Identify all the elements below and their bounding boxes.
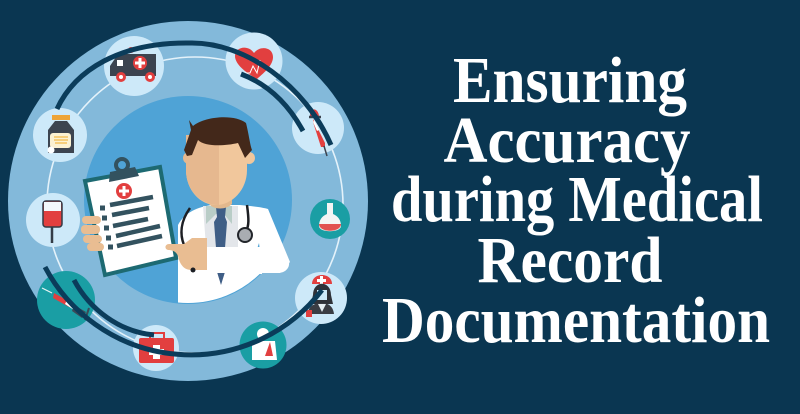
inner blue circle xyxy=(84,96,292,304)
face xyxy=(186,135,247,205)
neck xyxy=(209,192,232,208)
doctor figure xyxy=(81,117,290,303)
icon: heart xyxy=(226,32,282,90)
hand left xyxy=(81,216,104,251)
icon: syringe xyxy=(37,271,95,329)
icon: dropper xyxy=(292,102,344,156)
coat xyxy=(178,205,290,303)
thin white ring xyxy=(47,57,343,353)
pointing hand xyxy=(165,238,207,270)
title: Ensuring xyxy=(453,44,687,117)
icon: blood bag xyxy=(26,193,80,247)
icon: first aid kit xyxy=(133,325,179,371)
icon: medicine jar xyxy=(33,108,87,162)
notch xyxy=(257,243,260,251)
title: Accuracy xyxy=(444,104,690,177)
clipboard xyxy=(85,159,176,275)
title: Record xyxy=(478,224,662,297)
sleeve xyxy=(207,247,289,273)
icon: nurse xyxy=(295,272,347,324)
shirt and tie xyxy=(203,206,238,247)
title xyxy=(382,44,770,357)
hair xyxy=(184,117,252,158)
curved arcs xyxy=(45,43,331,355)
icon: patient xyxy=(240,322,286,368)
icon: ambulance xyxy=(104,36,164,96)
icon: flask xyxy=(310,199,350,239)
outer disc xyxy=(8,21,368,381)
stethoscope xyxy=(182,205,248,245)
ears xyxy=(183,152,255,164)
